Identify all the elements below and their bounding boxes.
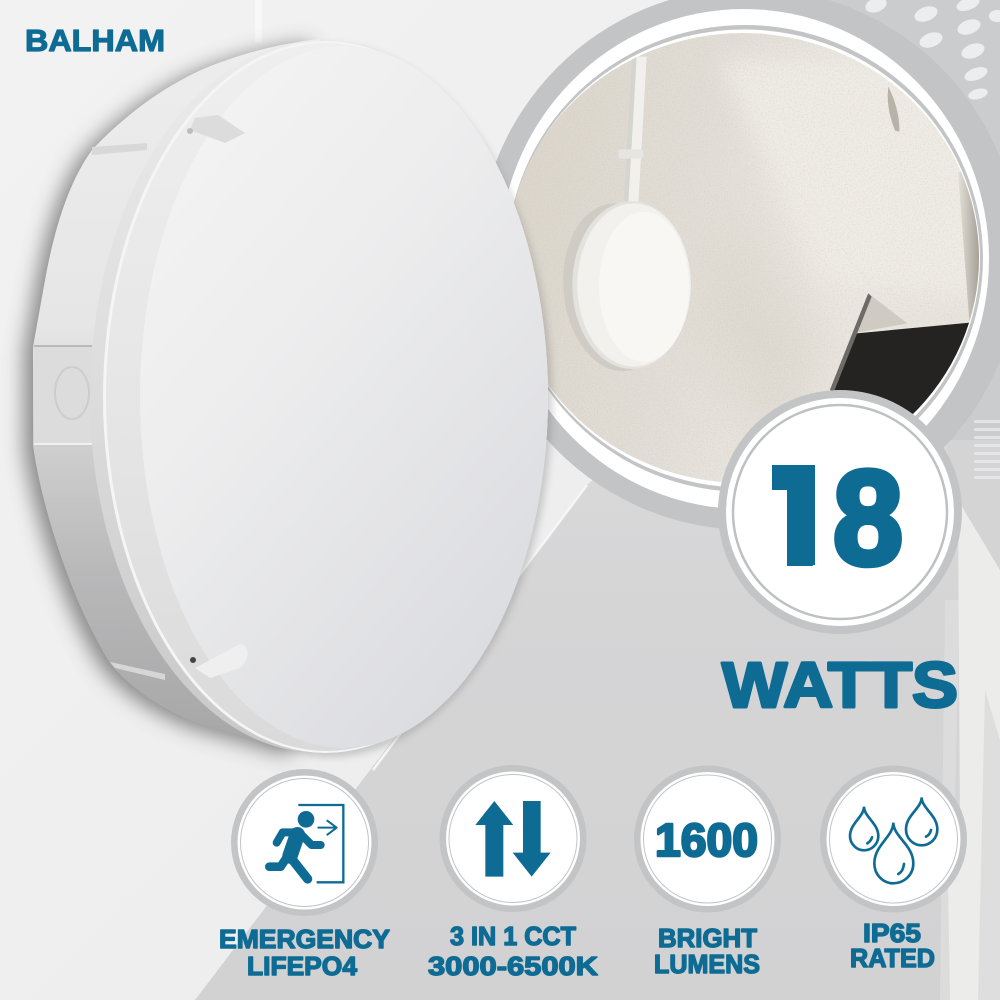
- badge: lumens: [634, 766, 781, 912]
- upper screw tab: [190, 115, 245, 143]
- dome lens: [140, 46, 548, 748]
- distant wall fitting: [888, 87, 899, 132]
- label: IP rating: RATED: [850, 943, 935, 973]
- housing: [33, 39, 330, 752]
- rim: [90, 41, 548, 753]
- wattage number: 1: [778, 444, 814, 593]
- label: emergency: EMERGENCY: [219, 924, 390, 954]
- lamp right shadow: [108, 45, 552, 757]
- brand title: BALHAM: [25, 23, 165, 58]
- lamp shadow: [24, 43, 321, 756]
- dark stair shape: [858, 294, 907, 332]
- label: emergency: LIFEPO4: [247, 951, 358, 981]
- inset photo ring: [478, 0, 1000, 530]
- label: lumens: BRIGHT: [658, 923, 757, 953]
- perforated metal dots: [863, 0, 1000, 479]
- housing tabs: [92, 143, 147, 155]
- icon: running person at exit door: [269, 805, 343, 882]
- label: lumens: LUMENS: [654, 949, 760, 979]
- icon: three water drops: [850, 797, 937, 883]
- wattage number: [762, 444, 903, 593]
- watts heading: WATTS: [722, 649, 958, 721]
- main product: round bulkhead light: [33, 39, 548, 753]
- label: lumens: [654, 923, 760, 979]
- label: IP rating: IP65: [863, 918, 921, 948]
- conduit: [556, 57, 970, 415]
- lumens number: 1600: [655, 814, 758, 866]
- badge: emergency: [231, 769, 378, 916]
- label: CCT: [428, 921, 598, 981]
- badge: IP rating: [820, 766, 967, 912]
- small light fitting: [556, 199, 691, 376]
- badge: CCT: [440, 765, 586, 912]
- label: emergency: [219, 924, 390, 981]
- junction panel: [34, 345, 92, 445]
- inset photo: installed light on concrete wall: [500, 25, 985, 490]
- label: CCT: 3 IN 1 CCT: [450, 921, 576, 951]
- icon: up and down arrows: [475, 801, 551, 877]
- wattage number: 8: [833, 444, 903, 593]
- label: IP rating: [850, 918, 935, 973]
- label: CCT: 3000-6500K: [428, 951, 598, 981]
- lower screw tab: [195, 644, 248, 678]
- wattage badge: [718, 390, 962, 634]
